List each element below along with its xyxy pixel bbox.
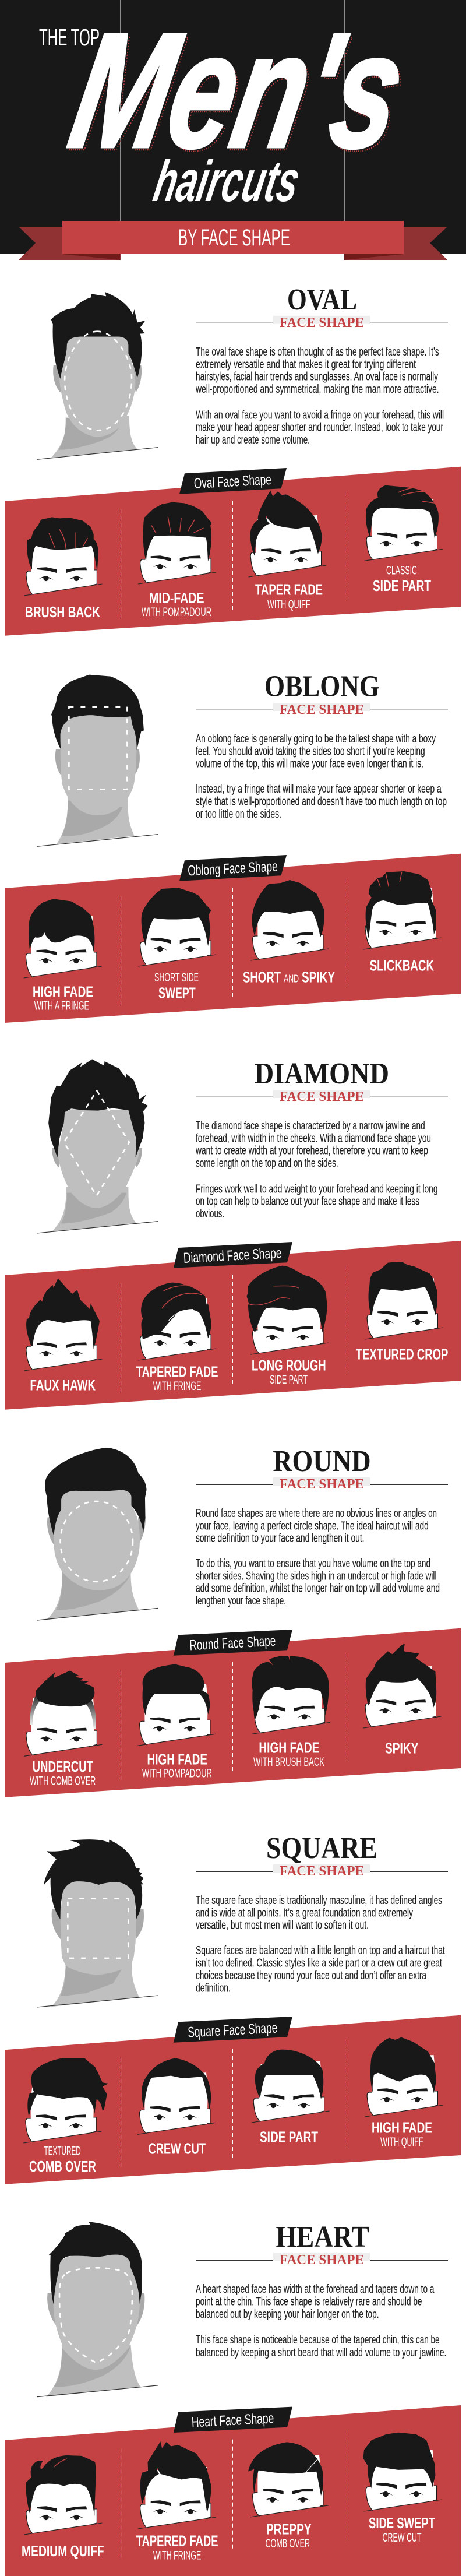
icon: medium quiff: MEDIUM QUIFF [22, 2542, 104, 2560]
illustration: square face [37, 1839, 158, 2007]
icon: textured comb over [23, 2058, 108, 2175]
icon: textured crop [356, 1262, 448, 1363]
icon: side part: SIDE PART [260, 2128, 318, 2145]
icon: high fade with brush back: HIGH FADE [259, 1739, 319, 1756]
tag: oval face shape: Oval Face Shape [193, 471, 271, 492]
subheading: face shape [196, 702, 448, 717]
icon: high fade with brush back: WITH BRUSH BACK [253, 1755, 324, 1769]
text: heart description [196, 2283, 446, 2359]
tag: oval face shape [179, 468, 287, 494]
icon: mid-fade [138, 502, 216, 619]
icon: long rough side part: LONG ROUGH [252, 1357, 326, 1374]
subheading: face shape: FACE SHAPE [280, 1864, 364, 1879]
tag: diamond face shape: Diamond Face Shape [183, 1245, 282, 1266]
heading: the top: THE TOP [39, 24, 100, 51]
section: oval [5, 283, 461, 636]
title: haircuts: haircuts [149, 149, 305, 214]
heading: heart: HEART [276, 2220, 369, 2254]
icon: high fade with pompadour [137, 1664, 216, 1780]
header: title block [0, 0, 466, 254]
section: oblong [5, 670, 461, 1023]
text: heart description: balanced out by keeping your hair longer on the top. [196, 2308, 379, 2321]
icon: high fade with pompadour: WITH POMPADOUR [142, 1767, 212, 1780]
icon: short and spiky: SHORT [243, 969, 281, 986]
illustration: oval face [37, 292, 158, 459]
icon: undercut with comb over: WITH COMB OVER [30, 1775, 96, 1788]
illustration: round face [37, 1448, 158, 1620]
heading: oval: OVAL [287, 283, 357, 316]
subheading: face shape [196, 1864, 448, 1879]
icon: faux hawk: FAUX HAWK [30, 1376, 96, 1393]
subheading: face shape [196, 1089, 448, 1104]
icon: brush back [24, 517, 102, 621]
illustration: oblong face [37, 675, 158, 846]
heading: square: SQUARE [266, 1832, 377, 1865]
icon: spiky [363, 1644, 442, 1757]
panel: diamond haircuts [5, 1241, 461, 1410]
icon: tapered fade with fringe: TAPERED FADE [136, 2532, 218, 2549]
icon: crew cut [137, 2058, 216, 2157]
icon: medium quiff [22, 2455, 104, 2560]
panel: oval haircuts [5, 467, 461, 636]
text: square description [196, 1894, 445, 1994]
icon: preppy comb over [248, 2442, 329, 2550]
ribbon: by face shape: BY FACE SHAPE [178, 225, 290, 251]
subheading: face shape: FACE SHAPE [280, 1089, 364, 1104]
text: diamond description: obvious. [196, 1208, 224, 1220]
icon: short side swept: SWEPT [158, 984, 196, 1001]
icon: slickback [363, 871, 442, 974]
tag: round face shape [174, 1630, 292, 1656]
icon: classic side part: SIDE PART [373, 577, 431, 594]
icon: tapered fade with fringe: TAPERED FADE [136, 1363, 218, 1380]
icon: high fade with a fringe [24, 899, 102, 1013]
icon: mid-fade: WITH POMPADOUR [142, 606, 211, 619]
illustration: heart face [37, 2222, 158, 2397]
heading: diamond: DIAMOND [255, 1057, 389, 1090]
icon: high fade with pompadour: HIGH FADE [147, 1750, 207, 1768]
subheading: face shape [196, 315, 448, 330]
icon: short and spiky [243, 880, 335, 986]
icon: short and spiky: SPIKY [302, 969, 335, 986]
icon: spiky: SPIKY [385, 1739, 418, 1757]
tag: diamond face shape [174, 1242, 292, 1268]
icon: taper fade [248, 491, 326, 611]
text: square description: versatile, but most men will want to soften it out. [196, 1919, 369, 1932]
subheading: face shape: FACE SHAPE [280, 1477, 364, 1492]
text: square description: definition. [196, 1982, 231, 1994]
subheading: face shape: FACE SHAPE [280, 702, 364, 717]
section: round [5, 1445, 461, 1797]
text: diamond description [195, 1120, 438, 1220]
icon: high fade with quiff: HIGH FADE [372, 2118, 432, 2136]
tag: heart face shape [174, 2407, 292, 2433]
icon: short side swept: SHORT SIDE [154, 971, 199, 984]
icon: tapered fade with fringe: WITH FRINGE [153, 2549, 201, 2563]
panel: square haircuts [5, 2015, 461, 2184]
text: round description: lengthen your face shape. [196, 1595, 286, 1607]
icon: side swept crew cut: CREW CUT [383, 2531, 422, 2545]
heading: oblong: OBLONG [264, 670, 380, 703]
icon: crew cut: CREW CUT [149, 2139, 206, 2157]
tag: round face shape: Round Face Shape [189, 1633, 276, 1653]
text: diamond description: some length on the top and on the sides. [196, 1157, 338, 1170]
icon: tapered fade with fringe: WITH FRINGE [153, 1380, 201, 1393]
panel: heart haircuts [5, 2405, 461, 2576]
icon: slickback: SLICKBACK [370, 957, 434, 974]
text: oblong description [196, 733, 447, 821]
icon: mid-fade: MID-FADE [149, 589, 204, 607]
icon: taper fade: TAPER FADE [255, 580, 323, 598]
icon: undercut with comb over: UNDERCUT [33, 1758, 93, 1775]
heading: round: ROUND [273, 1445, 371, 1478]
ribbon: by face shape [19, 221, 447, 260]
text: oblong description: or too little on the sides. [196, 808, 281, 821]
subheading: face shape [196, 2253, 448, 2268]
icon: preppy comb over: PREPPY [266, 2521, 312, 2538]
subheading: face shape: FACE SHAPE [280, 2253, 364, 2268]
icon: short and spiky: AND [284, 973, 299, 985]
icon: long rough side part: SIDE PART [270, 1373, 308, 1386]
text: round description [196, 1507, 440, 1607]
tag: heart face shape: Heart Face Shape [191, 2410, 274, 2431]
icon: high fade with quiff [365, 2037, 443, 2149]
icon: faux hawk [24, 1278, 102, 1393]
subheading: face shape [196, 1477, 448, 1492]
icon: textured comb over: COMB OVER [29, 2158, 96, 2175]
text: round description: some definition to your face and lengthen it out. [196, 1532, 365, 1545]
icon: side part [252, 2050, 330, 2145]
subheading: face shape: FACE SHAPE [280, 315, 364, 330]
icon: side swept crew cut [363, 2433, 442, 2545]
text: oval description [195, 346, 444, 446]
icon: high fade with a fringe: HIGH FADE [33, 983, 93, 1001]
illustration: diamond face [37, 1059, 158, 1233]
icon: brush back: BRUSH BACK [25, 603, 100, 621]
icon: long rough side part [246, 1266, 329, 1386]
icon: short side swept [138, 888, 216, 1001]
icon: high fade with quiff: WITH QUIFF [380, 2135, 423, 2149]
section: square [5, 1832, 461, 2184]
icon: classic side part: CLASSIC [386, 564, 417, 578]
panel: oblong haircuts [5, 854, 461, 1023]
icon: classic side part [365, 485, 443, 594]
icon: side swept crew cut: SIDE SWEPT [369, 2514, 435, 2532]
section: heart [5, 2220, 461, 2576]
icon: high fade with a fringe: WITH A FRINGE [34, 1000, 89, 1013]
icon: tapered fade with fringe [136, 2441, 218, 2563]
icon: tapered fade with fringe [136, 1283, 218, 1393]
panel: round haircuts [5, 1628, 461, 1797]
tag: oblong face shape: Oblong Face Shape [188, 858, 278, 879]
icon: taper fade: WITH QUIFF [267, 598, 310, 611]
section: diamond [5, 1057, 461, 1410]
icon: undercut with comb over [24, 1671, 102, 1788]
text: oval description: hair up and create some volume. [196, 434, 310, 446]
tag: square face shape [174, 2017, 292, 2043]
tag: square face shape: Square Face Shape [188, 2020, 278, 2041]
icon: textured comb over: TEXTURED [44, 2144, 81, 2158]
icon: preppy comb over: COMB OVER [266, 2537, 310, 2550]
icon: high fade with brush back [252, 1656, 330, 1769]
tag: oblong face shape [179, 855, 287, 881]
